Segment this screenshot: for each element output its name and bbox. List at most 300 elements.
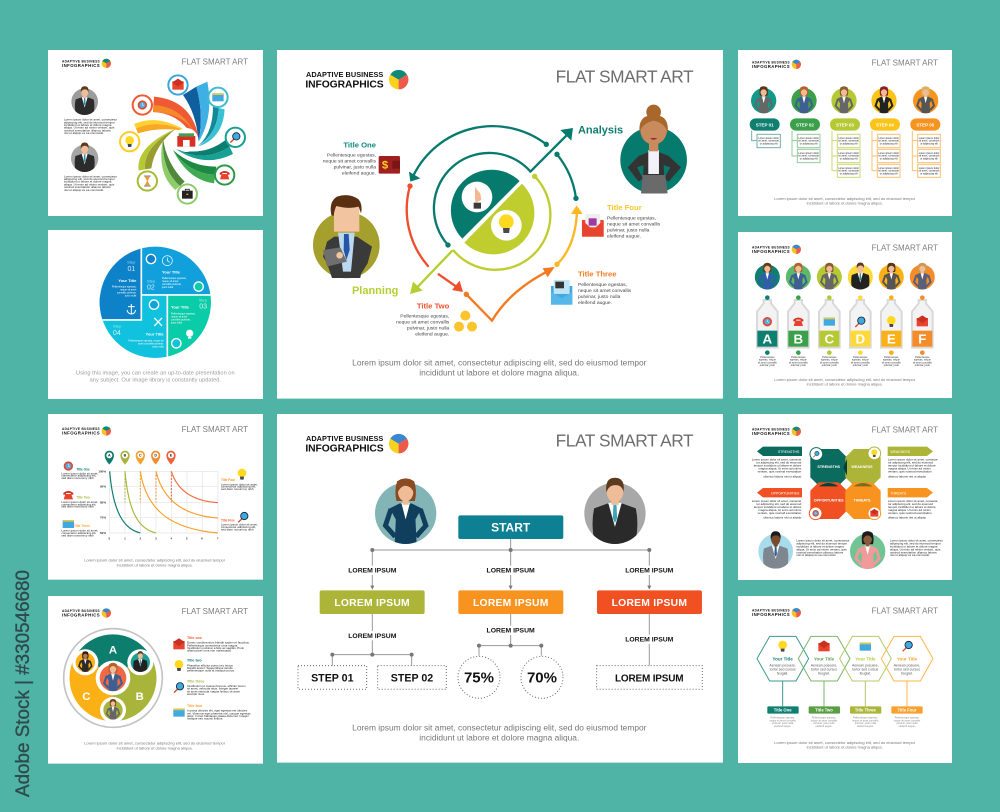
connectors	[330, 539, 651, 666]
text block: incididunt ut labore et dolore magna	[890, 544, 938, 548]
tag notes: sit amet convallis	[758, 361, 778, 364]
text block: nisi ut aliquip ex ea commodo	[796, 553, 836, 557]
badges	[809, 447, 881, 520]
box text: sit amet, consectet	[758, 140, 779, 143]
connectors and title bars: Pellentesque egestas,	[853, 717, 878, 720]
hexagon texts: Aenean posuere,	[811, 663, 837, 667]
left legend	[61, 461, 98, 537]
chart: 1	[124, 537, 126, 541]
connectors and title bars: Title Four	[898, 707, 917, 712]
banner: threats: magna aliqua. Ut enim ad minim	[888, 508, 931, 512]
caption: Lorem ipsum dolor sit amet, consectetur adipiscing elit, sed do eiusmod tempor	[84, 740, 226, 745]
caption: incididunt ut labore et dolore magna aliqua.	[419, 369, 579, 378]
box text: sit amet, consectet	[838, 155, 859, 158]
hexagon texts: tortor sed cursus	[852, 667, 879, 671]
lorem ipsum box: LOREM IPSUM	[615, 673, 684, 684]
legend: Vestibulum ut massa rhoncus, efficitur lorem	[187, 684, 246, 688]
tag notes: sit amet convallis	[851, 361, 871, 364]
panel: spiral diagram	[48, 50, 263, 216]
box text: Lorem ipsum dolor	[758, 137, 779, 140]
caption	[774, 196, 916, 206]
banner: opportunities: Lorem ipsum dolor sit amet, consecte	[752, 499, 802, 503]
step 03: 03	[199, 304, 207, 311]
block: title three: Pellentesque egestas,	[578, 282, 627, 288]
panel: org flow chart	[277, 414, 723, 763]
hexagon texts: Your Title	[897, 656, 918, 661]
person: businesswoman	[375, 478, 436, 545]
slide header: INFOGRAPHICS	[752, 612, 790, 617]
person: woman analyst	[620, 105, 687, 193]
slide header	[305, 430, 694, 455]
octagons: OPPORTUNITIES	[814, 499, 844, 503]
chart: 5	[186, 537, 188, 541]
connector labels: LOREM IPSUM	[348, 568, 397, 575]
chart: 2	[139, 537, 141, 541]
slide header: ADAPTIVE BUSINESS	[752, 427, 790, 431]
text block: adipiscing elit, sed do eiusmod tempor	[64, 120, 115, 124]
tags A to F: C	[825, 332, 835, 347]
tag notes: pulvinar, justo	[791, 364, 807, 367]
slide header: ADAPTIVE BUSINESS	[306, 70, 383, 79]
step 03	[170, 297, 208, 339]
slide header: INFOGRAPHICS	[62, 431, 100, 436]
right legend	[221, 469, 258, 531]
text block: adipiscing elit, sed do eiusmod tempor	[64, 177, 115, 181]
step 03: Step	[199, 297, 208, 302]
hexagon texts: Your Title	[814, 656, 835, 661]
slide header: FLAT SMART ART	[182, 425, 248, 434]
hexagon texts: Aenean posuere,	[769, 663, 796, 667]
slide header	[62, 607, 248, 618]
right legend: consectetur adipiscing elit,	[221, 525, 256, 529]
label: Analysis: Analysis	[578, 124, 623, 136]
location pins: A	[108, 454, 111, 458]
connector labels: LOREM IPSUM	[625, 637, 674, 644]
hexagon icons	[778, 640, 912, 652]
person: businessman	[584, 478, 646, 545]
block: title four	[607, 203, 661, 239]
caption: incididunt ut labore et dolore magna aliqua.	[807, 745, 883, 750]
icon: red envelope	[582, 214, 604, 237]
slide header	[62, 57, 248, 68]
block: title two: eleifend augue.	[415, 332, 449, 338]
slide header: FLAT SMART ART	[556, 430, 694, 450]
puzzle pieces	[98, 245, 215, 358]
box text: Lorem ipsum dolor	[919, 137, 939, 140]
octagons	[810, 449, 881, 519]
box text: ur adipiscing elit	[920, 172, 938, 175]
left legend: sed diam nonummy nibh	[61, 476, 94, 480]
step 01: Step	[127, 260, 136, 265]
box text: Lorem ipsum dolor	[798, 137, 819, 140]
block: title two: pulvinar, justo nulla	[407, 326, 450, 332]
tag notes: Pellentesque	[760, 356, 775, 359]
tags A to F: F	[918, 332, 926, 347]
connectors and title bars: Title Three	[855, 707, 876, 712]
step pills	[750, 118, 940, 131]
connectors and title bars: Pellentesque egestas,	[895, 717, 920, 720]
banner: threats: veniam, quis nostrud exercitation	[888, 511, 932, 515]
block: title one: neque sit amet convallis	[323, 159, 376, 165]
chart: 4	[170, 537, 172, 541]
legend: ullamcorper urna non malesuada.	[187, 649, 232, 653]
slide header: ADAPTIVE BUSINESS	[62, 427, 100, 431]
step 01: STEP 01	[311, 672, 354, 684]
slide header: INFOGRAPHICS	[752, 64, 790, 69]
connectors and title bars: Pellentesque egestas,	[812, 717, 837, 720]
text block: adipiscing elit, sed do eiusmod tempor	[796, 541, 847, 545]
step 01: justo nulla	[124, 295, 137, 298]
connectors and title bars: pulvinar, justo nulla	[896, 722, 918, 725]
connectors and title bars: eleifend augue.	[857, 725, 874, 728]
box: red	[597, 590, 702, 614]
chart: 7	[217, 537, 219, 541]
text block: incididunt ut labore et dolore magna	[796, 544, 844, 548]
box text: ur adipiscing elit	[840, 157, 858, 160]
banner: opportunities: tur adipiscing elit, sed do eiusmod	[756, 502, 802, 506]
slide header: ADAPTIVE BUSINESS	[62, 59, 100, 63]
banner: opportunities: veniam, quis nostrud exercitation	[758, 511, 802, 515]
icon: anchor	[127, 304, 136, 314]
step pills: STEP 04	[876, 122, 894, 127]
box text: sit amet, consectet	[878, 140, 899, 143]
banner: weakness: WEAKNESS	[890, 450, 911, 454]
legend: sit amet, vehicula risus. Integer laoreet	[187, 687, 238, 691]
slide header: ADAPTIVE BUSINESS	[62, 609, 100, 613]
box text: ur adipiscing elit	[880, 142, 898, 145]
legend: Title two	[187, 659, 203, 663]
box text: Lorem ipsum dolor	[919, 167, 939, 170]
start box	[458, 515, 563, 539]
banner: strengths: tempor incididunt ut labore et dolore	[754, 464, 802, 468]
caption: Using this image, you can create an up-to-date presentation on	[76, 371, 235, 377]
slide header: FLAT SMART ART	[182, 607, 248, 616]
banner: strengths: magna aliqua. Ut enim ad minim	[759, 467, 802, 471]
connector labels: LOREM IPSUM	[625, 568, 674, 575]
left legend: consectetur adipiscing elit,	[61, 531, 97, 535]
block: title four: pulvinar, justo nulla	[607, 227, 650, 233]
connectors and title bars: pulvinar, justo nulla	[855, 722, 876, 725]
tag notes: egestas, neque	[759, 359, 776, 362]
box: olive	[320, 590, 425, 614]
hexagon texts	[769, 656, 920, 675]
person: woman with tablet	[850, 531, 885, 570]
icon: tools	[154, 318, 162, 326]
cycle diagram	[64, 629, 162, 727]
panel: ABC circle	[48, 596, 263, 764]
icon: coins	[454, 311, 477, 332]
hexagon texts: tortor sed cursus	[770, 667, 796, 671]
slide header: FLAT SMART ART	[872, 243, 938, 252]
slide header: FLAT SMART ART	[182, 57, 248, 66]
box text: Lorem ipsum dolor	[838, 167, 859, 170]
box text: ur adipiscing elit	[920, 142, 938, 145]
step 01: Pellentesque egestas,	[112, 286, 137, 289]
text block	[64, 118, 117, 135]
tag notes: pulvinar, justo	[853, 364, 869, 367]
step 02: neque sit amet	[162, 280, 179, 283]
block: title three: pulvinar, justo nulla	[578, 294, 621, 300]
box: olive: LOREM IPSUM	[334, 598, 410, 609]
box text: sit amet, consectet	[919, 140, 940, 143]
slide header: ADAPTIVE BUSINESS	[752, 245, 790, 249]
block: title four: neque sit amet convallis	[607, 221, 661, 227]
tag notes: egestas, neque	[852, 359, 869, 362]
right legend: Lorem ipsum dolor sit amet,	[221, 523, 258, 527]
left legend: Title Three	[74, 524, 90, 528]
text block: Lorem ipsum dolor sit amet, consectetur	[890, 538, 943, 542]
banner: opportunities: magna aliqua. Ut enim ad minim	[759, 508, 802, 512]
tag notes: pulvinar, justo	[760, 364, 776, 367]
connectors and title bars: pulvinar, justo nulla	[813, 722, 835, 725]
block: title two: Title Two	[417, 301, 450, 310]
tags A to F	[757, 295, 933, 348]
legend: Title one	[187, 636, 202, 640]
chart: 100%	[98, 469, 106, 473]
left legend: Title One	[76, 467, 90, 471]
connectors and title bars: eleifend augue.	[815, 725, 833, 728]
metric 70%	[521, 656, 563, 698]
caption: Lorem ipsum dolor sit amet, consectetur adipiscing elit, sed do eiusmod tempor	[774, 740, 916, 745]
hexagon texts: Your Title	[855, 656, 876, 661]
legend: Vestibulum pulvinar a felis ac sagittis. Proin	[187, 646, 245, 650]
tag notes: Pellentesque	[915, 356, 930, 359]
tag notes: sit amet convallis	[820, 361, 840, 364]
metric 70%: 70%	[527, 670, 557, 687]
step 03: Pellentesque egestas,	[171, 312, 196, 315]
tag notes: Pellentesque	[822, 356, 837, 359]
tag notes: sit amet convallis	[913, 361, 933, 364]
chart: 6	[201, 537, 203, 541]
box text: ur adipiscing elit	[800, 142, 818, 145]
right legend: sed diam nonummy nibh	[221, 487, 254, 491]
slide header: INFOGRAPHICS	[752, 249, 790, 254]
step 04: Step	[113, 324, 122, 329]
icon: wallet	[379, 156, 400, 174]
box text: Lorem ipsum dolor	[919, 152, 939, 155]
text block: aliqua. Ut enim ad minim veniam, quis	[890, 547, 941, 551]
slide header	[752, 425, 938, 436]
text block: adipiscing elit, sed do eiusmod tempor	[890, 541, 941, 545]
step people	[751, 86, 938, 114]
step pills: STEP 01	[756, 122, 774, 127]
left legend: sed diam nonummy nibh	[61, 505, 94, 509]
person: man with briefcase	[313, 195, 380, 278]
box text: sit amet, consectet	[838, 170, 859, 173]
text block: nostrud exercitation ullamco laboris	[796, 550, 844, 554]
person: man with crossed arms	[71, 86, 98, 116]
box text: sit amet, consectet	[878, 170, 899, 173]
step pills: STEP 03	[836, 122, 854, 127]
hexagon texts: feugiat.	[777, 671, 788, 675]
tag notes: pulvinar, justo	[884, 364, 900, 367]
right legend: consectetur adipiscing elit,	[221, 485, 256, 489]
hexagon texts: feugiat.	[901, 671, 913, 675]
legend: suscipit risus.	[187, 692, 205, 696]
slide header: FLAT SMART ART	[872, 425, 938, 434]
connector labels: LOREM IPSUM	[348, 633, 397, 640]
slide header: FLAT SMART ART	[556, 66, 694, 86]
block: title two: Pellentesque egestas,	[400, 314, 449, 320]
tag notes: sit amet convallis	[882, 361, 902, 364]
chart: 0	[108, 537, 110, 541]
step 02: convallis pulvinar,	[162, 283, 182, 286]
panel: hexagon timeline	[738, 596, 952, 763]
box text: ur adipiscing elit	[840, 172, 858, 175]
stock credit: Adobe Stock | #330546680	[13, 570, 34, 797]
box text: sit amet, consectet	[798, 140, 819, 143]
left legend: sed diam nonummy nibh	[61, 533, 94, 537]
step 01: neque sit amet	[120, 289, 137, 292]
banner: strengths	[752, 447, 802, 478]
cycle diagram: A	[109, 644, 117, 656]
person: man in suit	[71, 142, 98, 173]
text block: Lorem ipsum dolor sit amet, consectetur	[64, 118, 117, 122]
caption: Lorem ipsum dolor sit amet, consectetur adipiscing elit, sed do eiusmod tempor	[774, 196, 916, 201]
banner: strengths: STRENGTHS	[778, 450, 800, 454]
right legend: sed diam nonummy nibh	[221, 527, 254, 531]
box text: sit amet, consectet	[878, 155, 899, 158]
center split disc	[451, 170, 534, 254]
hexagon texts: tortor sed cursus	[894, 667, 920, 671]
box text: sit amet, consectet	[838, 140, 859, 143]
text block: nisi ut aliquip ex ea commodo	[64, 188, 104, 192]
caption: incididunt ut labore et dolore magna aliqua.	[807, 382, 883, 387]
box: red: LOREM IPSUM	[612, 598, 687, 609]
cycle diagram: B	[136, 691, 144, 703]
caption: Lorem ipsum dolor sit amet, consectetur adipiscing elit, sed do eiusmod tempor	[84, 557, 226, 562]
icon: blue envelope	[551, 280, 572, 305]
slide header: INFOGRAPHICS	[62, 613, 100, 618]
text block: Lorem ipsum dolor sit amet, consectetur	[64, 174, 117, 178]
legend: vel. Vivamus eget pharetra nisl, congue egestas	[187, 711, 251, 715]
banner: weakness: ullamco laboris nisi ut aliquip	[888, 474, 926, 478]
step 02: Pellentesque egestas,	[162, 277, 187, 280]
caption	[352, 359, 647, 378]
connector labels: LOREM IPSUM	[487, 568, 535, 575]
caption	[774, 377, 916, 387]
connectors and title bars: Pellentesque egestas,	[770, 717, 795, 720]
connectors and title bars	[767, 681, 923, 728]
block: title two	[396, 301, 450, 338]
legend: Donec condimentum blandit sapien et faucibus.	[187, 641, 250, 645]
banner: weakness: tur adipiscing elit, sed do eiusmod	[888, 461, 933, 465]
step 03: neque sit amet	[171, 315, 188, 318]
banner: threats: Lorem ipsum dolor sit amet, consecte	[888, 499, 938, 503]
caption	[84, 740, 226, 750]
step 01	[298, 666, 367, 689]
arc arrows	[407, 126, 579, 321]
connector labels	[345, 566, 676, 644]
text block: aliqua. Ut enim ad minim veniam, quis	[796, 547, 847, 551]
caption: incididunt ut labore et dolore magna aliqua.	[807, 201, 883, 206]
block: title one: eleifend augue.	[342, 171, 376, 177]
box text: Lorem ipsum dolor	[878, 167, 899, 170]
cycle diagram: C	[82, 691, 90, 703]
hexagons	[757, 636, 933, 681]
box text: ur adipiscing elit	[880, 172, 898, 175]
start box: START	[491, 521, 531, 535]
connectors and title bars: neque sit amet convallis	[769, 719, 797, 722]
box text	[758, 137, 940, 175]
banner: strengths: Lorem ipsum dolor sit amet, consecte	[752, 458, 802, 462]
tags A to F: D	[856, 332, 866, 347]
connectors and title bars: eleifend augue.	[774, 725, 791, 728]
banner: weakness	[888, 447, 938, 478]
tag notes: pulvinar, justo	[822, 364, 838, 367]
tag notes: egestas, neque	[790, 359, 807, 362]
tags A to F: B	[794, 332, 804, 347]
panel: five steps	[738, 50, 952, 216]
octagons: STRENGTHS	[817, 465, 840, 469]
hexagon texts: Aenean posuere,	[894, 663, 920, 667]
hexagon texts: Aenean posuere,	[852, 663, 879, 667]
step 02: Your Title	[162, 269, 181, 274]
box text: sit amet, consectet	[919, 155, 940, 158]
caption: any subject. Our image library is constantly updated.	[90, 378, 221, 384]
tags A to F: E	[887, 332, 896, 347]
box text: Lorem ipsum dolor	[878, 137, 899, 140]
box text: Lorem ipsum dolor	[878, 152, 899, 155]
tag notes: Pellentesque	[853, 356, 868, 359]
text block: aliqua. Ut enim ad minim veniam, quis	[64, 182, 115, 186]
legend: Phasellus efficitur purus nec lectus	[187, 663, 233, 667]
tag notes: pulvinar, justo	[915, 364, 931, 367]
hexagon texts: feugiat.	[818, 671, 830, 675]
banner: opportunities: tempor incididunt ut labore et dolore	[754, 505, 802, 509]
legend: sit amet vehicula magna finibus sit amet	[187, 689, 240, 693]
text block	[796, 538, 849, 557]
chart	[98, 469, 219, 541]
caption: Lorem ipsum dolor sit amet, consectetur adipiscing elit, sed do eiusmod tempor	[352, 359, 647, 368]
people in cycle	[72, 649, 153, 723]
text block	[890, 538, 943, 557]
slide header: ADAPTIVE BUSINESS	[752, 608, 790, 612]
block: title three	[578, 270, 632, 306]
slide header: INFOGRAPHICS	[305, 80, 384, 91]
slide header	[752, 58, 938, 69]
box: orange	[458, 590, 563, 614]
spiral petals	[134, 82, 233, 190]
legend: tristique nec mauris finibus.	[187, 717, 223, 721]
chart: 70%	[100, 516, 106, 520]
tag notes: Pellentesque	[791, 356, 806, 359]
octagons: THREATS	[853, 499, 871, 503]
text block: nisi ut aliquip ex ea commodo	[64, 131, 104, 135]
step 04: justo nulla	[151, 346, 164, 349]
banner: weakness: magna aliqua. Ut enim ad minim	[888, 467, 931, 471]
block: title one: pulvinar, justo nulla	[334, 165, 376, 171]
left legend: Lorem ipsum dolor sit amet,	[61, 471, 98, 475]
hexagon texts: feugiat.	[860, 671, 871, 675]
legend: In porta ultricies elit, eget egestas est ultricies	[187, 709, 248, 713]
location pins: B	[124, 454, 127, 458]
label: Planning: Planning	[352, 285, 398, 297]
caption: incididunt ut labore et dolore magna aliqua.	[117, 562, 193, 567]
slide header	[62, 425, 248, 436]
step 04: amet convallis pulvinar,	[138, 343, 164, 346]
panel: SWOT	[738, 414, 952, 580]
left legend: consectetur adipiscing elit,	[61, 474, 97, 478]
caption: Lorem ipsum dolor sit amet, consectetur adipiscing elit, sed do eiusmod tempor	[774, 377, 916, 382]
left legend: Lorem ipsum dolor sit amet,	[61, 500, 98, 504]
banner: opportunities: OPPORTUNITIES	[771, 491, 800, 495]
step 01: convallis pulvinar,	[117, 292, 137, 295]
banner: threats: THREATS	[890, 491, 907, 495]
connectors and title bars: Title One	[774, 707, 792, 712]
slide header: ADAPTIVE BUSINESS	[752, 60, 790, 64]
step 03: justo nulla	[170, 321, 183, 324]
